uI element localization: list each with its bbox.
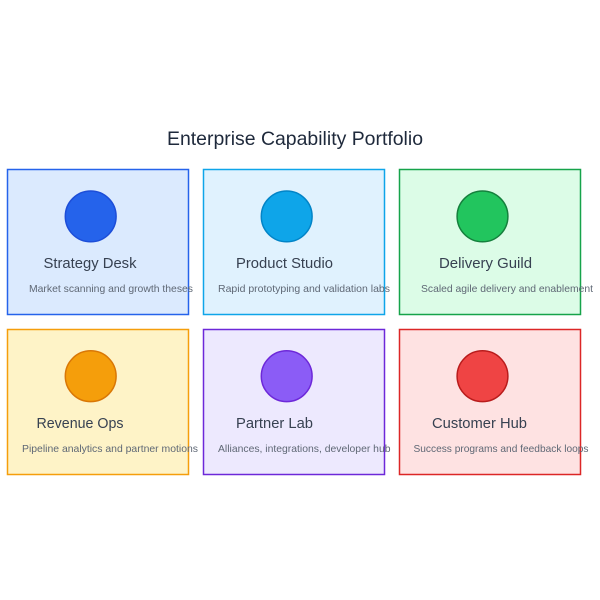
description: Strategy Desk: Market scanning and growth theses bbox=[29, 284, 193, 295]
panel: Strategy Desk bbox=[8, 170, 193, 314]
description: Partner Lab: Alliances, integrations, developer hub bbox=[218, 444, 391, 455]
icon: green circle bbox=[457, 191, 508, 242]
panel background bbox=[204, 170, 384, 314]
icon: violet circle bbox=[261, 351, 312, 402]
icon: blue circle bbox=[65, 191, 116, 242]
heading: Partner Lab: Partner Lab bbox=[236, 416, 313, 432]
title: Enterprise Capability Portfolio bbox=[167, 128, 423, 150]
heading: Delivery Guild: Delivery Guild bbox=[439, 256, 532, 272]
icon: red circle bbox=[457, 351, 508, 402]
panel background bbox=[8, 330, 188, 474]
panel: Product Studio bbox=[204, 170, 390, 314]
panel: Delivery Guild bbox=[400, 170, 593, 314]
heading: Revenue Ops: Revenue Ops bbox=[36, 416, 124, 432]
panel background bbox=[400, 330, 580, 474]
description: Delivery Guild: Scaled agile delivery and enablement bbox=[421, 284, 593, 295]
panel: Partner Lab bbox=[204, 330, 391, 474]
description: Product Studio: Rapid prototyping and validation labs bbox=[218, 284, 390, 295]
heading: Strategy Desk: Strategy Desk bbox=[44, 256, 137, 272]
description: Revenue Ops: Pipeline analytics and partner motions bbox=[22, 444, 198, 455]
icon: sky circle bbox=[261, 191, 312, 242]
icon: amber circle bbox=[65, 351, 116, 402]
description: Customer Hub: Success programs and feedback loops bbox=[414, 444, 588, 455]
panel: Revenue Ops bbox=[8, 330, 198, 474]
panel background bbox=[8, 170, 188, 314]
panel: Customer Hub bbox=[400, 330, 588, 474]
heading: Customer Hub: Customer Hub bbox=[432, 416, 527, 432]
panel background bbox=[204, 330, 384, 474]
panel background bbox=[400, 170, 580, 314]
heading: Product Studio: Product Studio bbox=[236, 256, 333, 272]
